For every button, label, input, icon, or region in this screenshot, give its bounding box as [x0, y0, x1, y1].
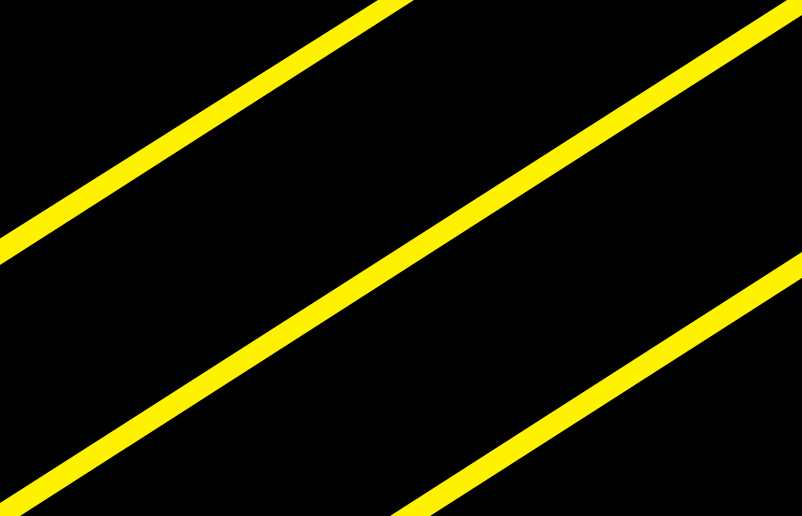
- stripe: upper left: [0, 0, 414, 265]
- stripe: lower right: [390, 252, 802, 516]
